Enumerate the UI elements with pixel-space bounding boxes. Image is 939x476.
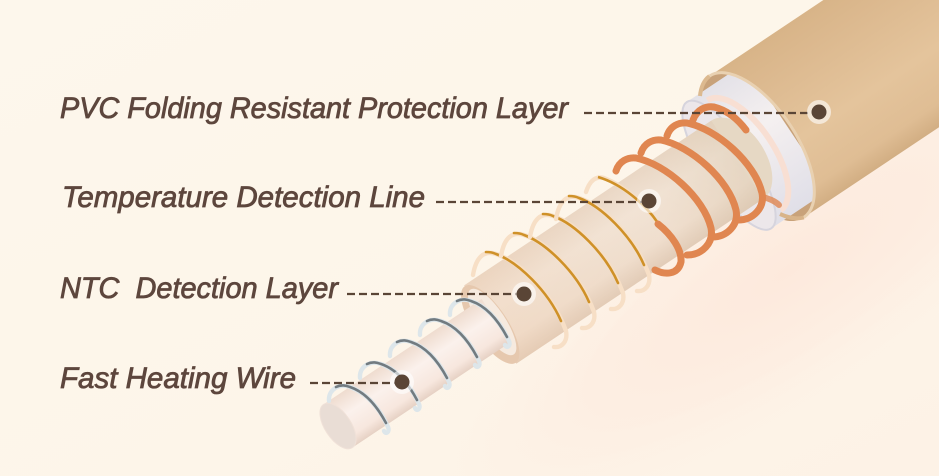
label: NTC layer: NTC Detection Layer	[60, 272, 339, 305]
PVC outer tube	[700, 0, 939, 218]
heating core	[313, 299, 510, 455]
fast heating wire coils	[329, 299, 510, 433]
tube opening	[676, 54, 837, 240]
label: PVC layer	[60, 92, 831, 125]
label: NTC layer	[60, 272, 536, 306]
label: heating wire	[60, 362, 414, 395]
white foil lining	[667, 63, 829, 242]
label: PVC layer: PVC Folding Resistant Protection Layer	[60, 92, 569, 125]
label: temperature line	[62, 181, 661, 214]
temperature detection gold coils	[473, 177, 658, 347]
orange insulated coils	[616, 107, 779, 273]
label: heating wire: Fast Heating Wire	[60, 362, 296, 395]
label: temperature line: Temperature Detection Line	[62, 181, 425, 214]
NTC detection layer	[450, 105, 787, 373]
